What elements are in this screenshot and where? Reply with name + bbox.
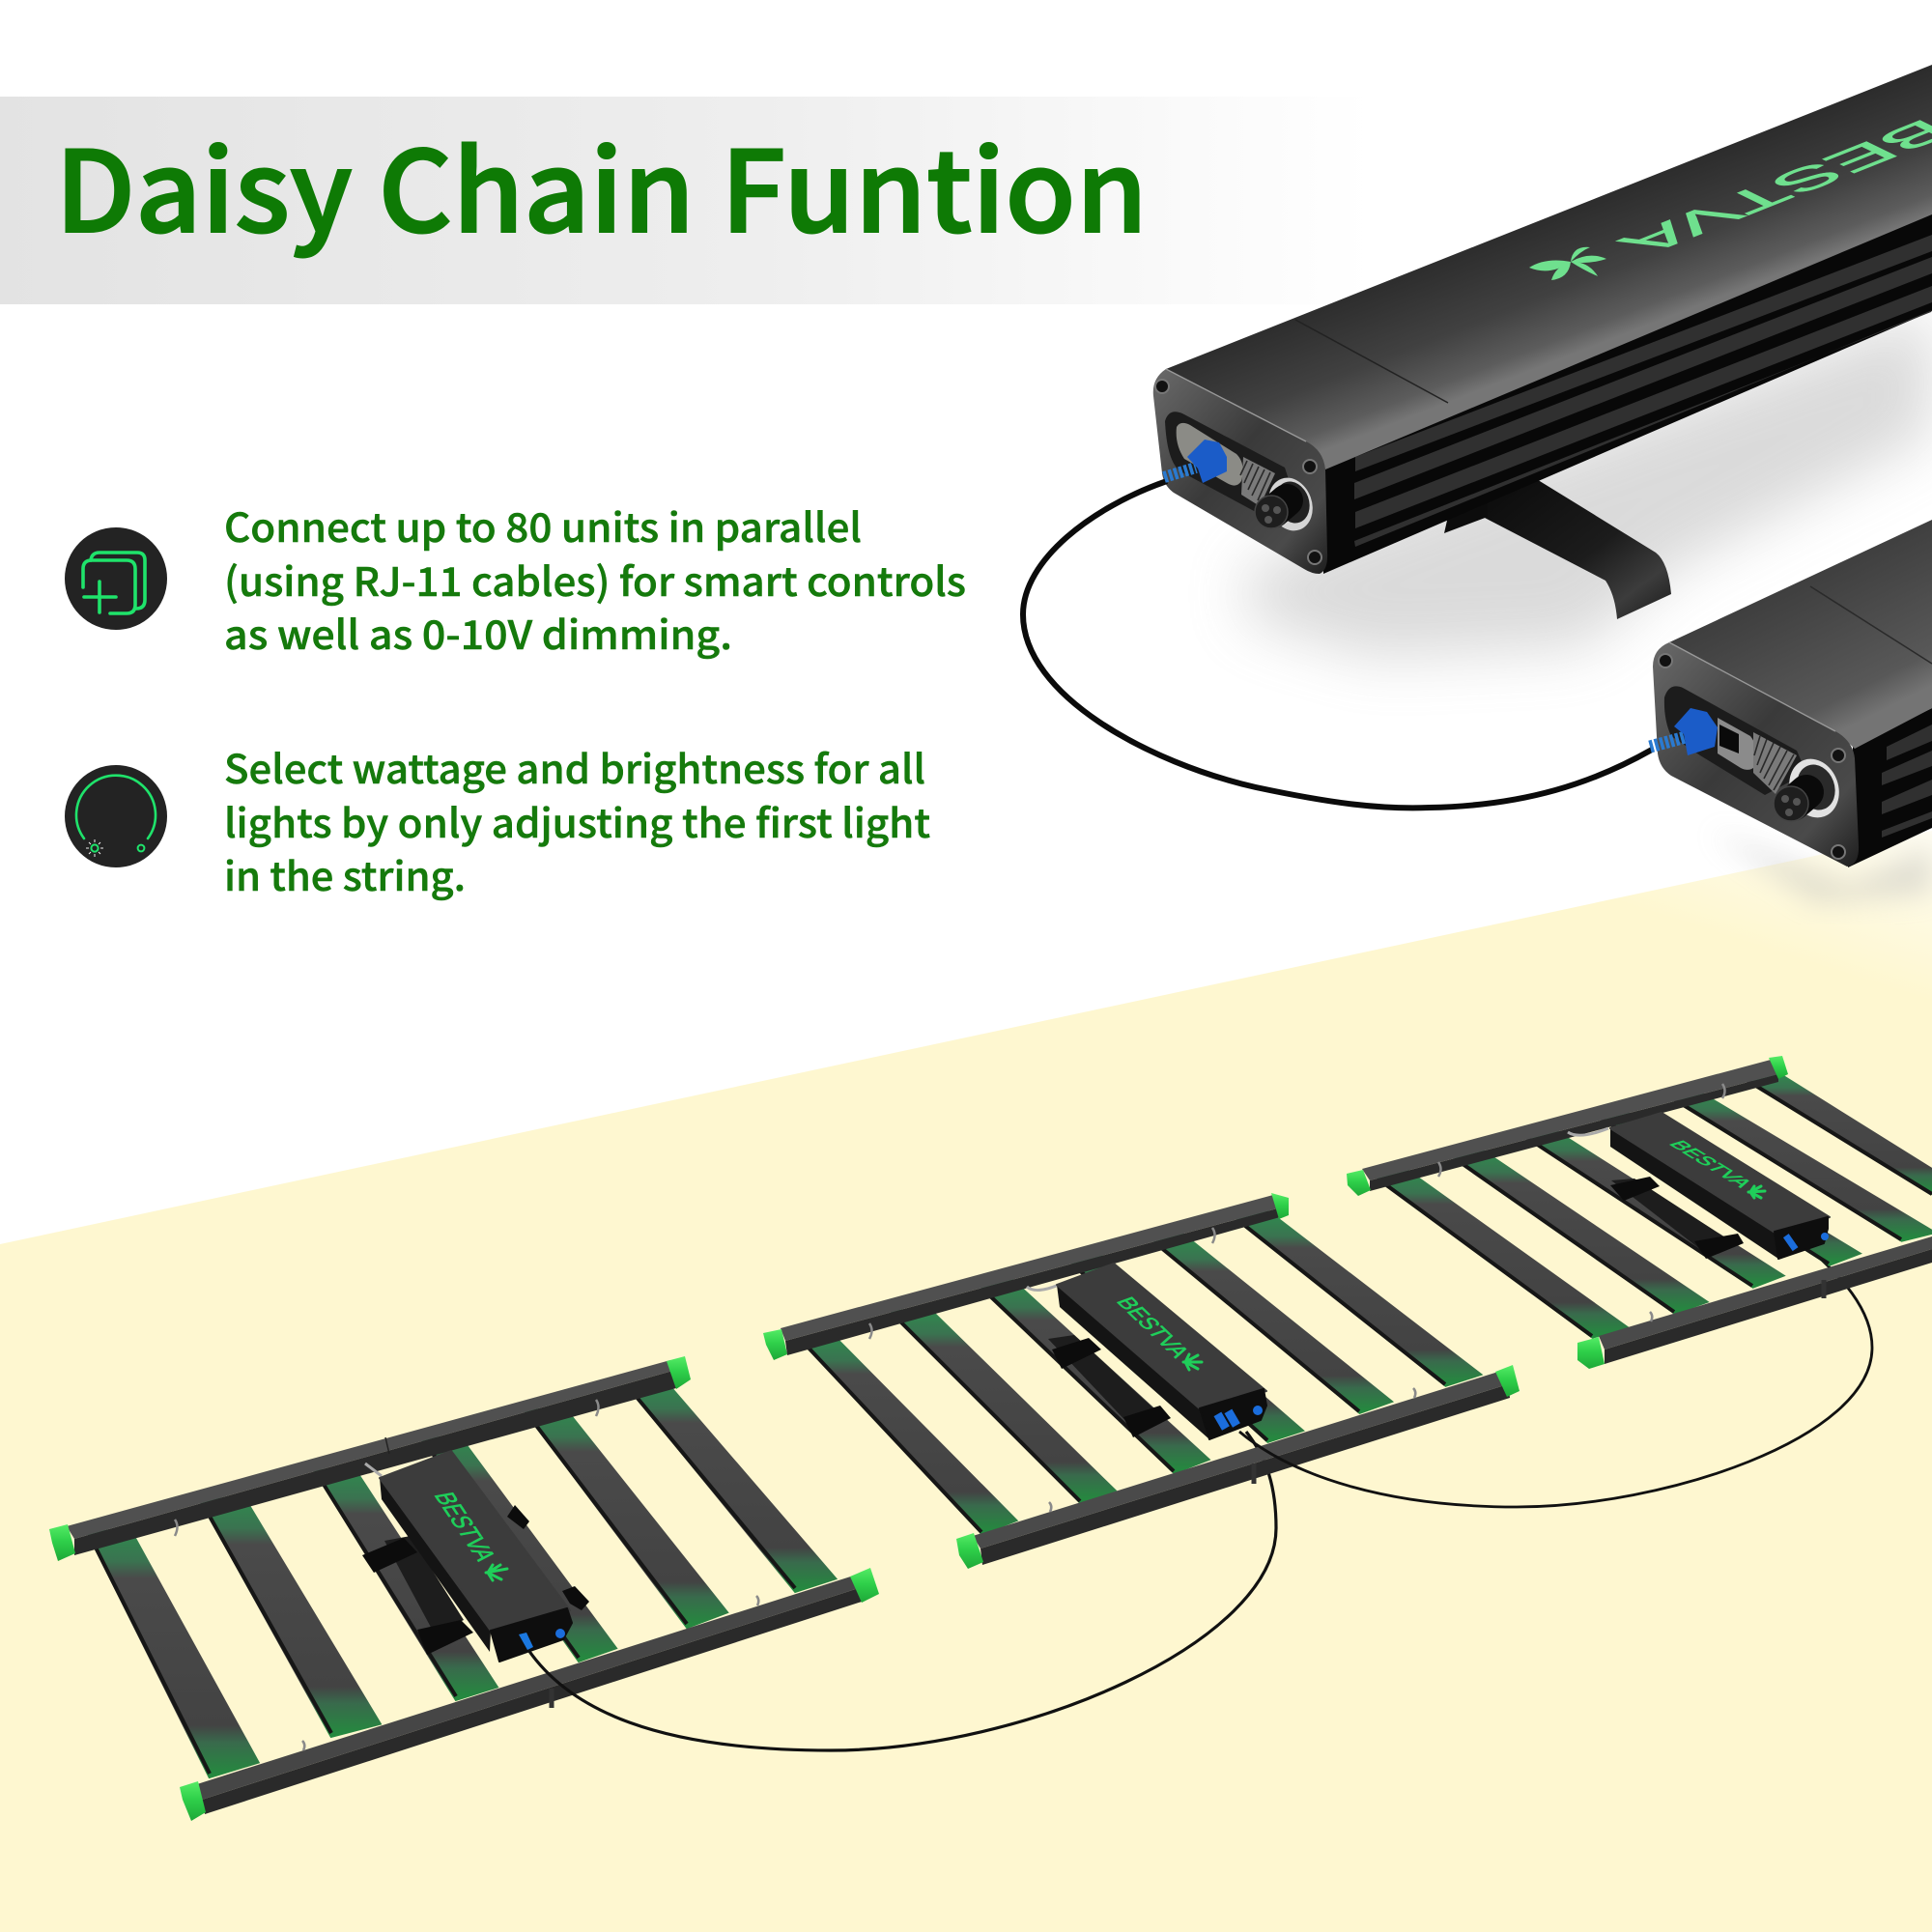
front face: [1153, 369, 1327, 574]
green corner caps: [763, 1193, 1520, 1569]
round connector: [1774, 752, 1847, 825]
driver box: [380, 1451, 572, 1662]
icon: dial: [65, 765, 167, 867]
close-up light 1: [1153, 65, 1932, 619]
connector pill: [1165, 412, 1294, 512]
fixture grid 1: [49, 1356, 879, 1821]
text block: wattage selection: Select wattage and brightness for all: [224, 737, 925, 795]
hatch panel: [1753, 732, 1797, 794]
text block: wattage selection: in the string.: [224, 844, 466, 902]
text block: wattage selection: lights by only adjusting the first light: [224, 791, 930, 849]
icon: stacked squares with plus: [65, 527, 167, 630]
logo: BESTVA: [428, 1491, 502, 1563]
side face: [1848, 708, 1932, 867]
bars: [1381, 1072, 1932, 1336]
seam: [1810, 586, 1932, 664]
cable 1: [528, 1432, 1276, 1750]
front edge highlight: [1166, 369, 1306, 441]
side face: [1323, 198, 1932, 574]
top face: [1669, 520, 1932, 749]
logo: BESTVA: [1663, 1139, 1757, 1189]
side ribs: [1882, 724, 1932, 838]
text block: wattage selection: [224, 737, 930, 902]
rail hooks: [175, 1400, 758, 1750]
top face: [1166, 65, 1932, 469]
bottom rail: [973, 1372, 1510, 1565]
text block: parallel connection: as well as 0-10V dimming.: [224, 603, 732, 661]
leaf logo: [1529, 247, 1606, 280]
blue plug on light 2: [1650, 708, 1718, 755]
background floor: [0, 831, 1932, 1932]
driver shadow strip: [1611, 1179, 1734, 1253]
bars: [91, 1381, 832, 1775]
bars: [805, 1214, 1476, 1532]
bottom rail: [1599, 1236, 1932, 1364]
text block: parallel connection: Connect up to 80 units in parallel: [224, 496, 862, 554]
brackets: [1052, 1338, 1171, 1437]
logo: BESTVA: [1110, 1294, 1195, 1360]
side ribs: [1354, 235, 1932, 547]
title banner: [0, 97, 1372, 304]
leaf: [1183, 1354, 1202, 1370]
soft shadows under close-up lights: [1246, 309, 1932, 903]
brackets: [1610, 1177, 1744, 1259]
leaf: [1748, 1186, 1765, 1198]
round connector: [1255, 471, 1320, 537]
inner oval: [1177, 423, 1243, 486]
driver shadow strip: [384, 1536, 464, 1634]
front edge highlight: [1669, 642, 1835, 731]
green corner caps: [49, 1356, 879, 1821]
top rail: [1362, 1060, 1778, 1191]
fixture grid 3: [1347, 1056, 1932, 1369]
blue plug on light 1: [1164, 440, 1227, 483]
text block: parallel connection: (using RJ-11 cables) for smart controls: [224, 550, 966, 608]
seam: [1295, 320, 1448, 403]
driver shadow strip: [1048, 1335, 1164, 1428]
top rail: [67, 1360, 676, 1555]
bottom rail: [197, 1575, 865, 1814]
title: Daisy Chain Funtion: [55, 102, 1148, 265]
close-up light 2: [1653, 520, 1932, 867]
leaf: [486, 1565, 507, 1580]
text block: parallel connection: [224, 496, 966, 661]
driver box: [1610, 1113, 1830, 1259]
inner oval with RJ port: [1718, 718, 1757, 770]
screws: [1659, 654, 1845, 859]
rail hooks: [869, 1228, 1415, 1512]
top rail: [781, 1195, 1281, 1355]
rail hooks: [1438, 1084, 1824, 1321]
cable 2: [1239, 1246, 1872, 1507]
hatch panel: [1240, 457, 1275, 506]
close-up cable: [1023, 481, 1652, 808]
brackets: [362, 1505, 589, 1655]
fixture grid 2: [763, 1193, 1520, 1569]
driver box: [1057, 1264, 1266, 1439]
green corner caps: [1347, 1056, 1788, 1369]
front face: [1653, 642, 1859, 867]
mounting bracket: [1444, 478, 1671, 619]
screws: [1155, 380, 1321, 564]
connector pill: [1664, 686, 1806, 795]
